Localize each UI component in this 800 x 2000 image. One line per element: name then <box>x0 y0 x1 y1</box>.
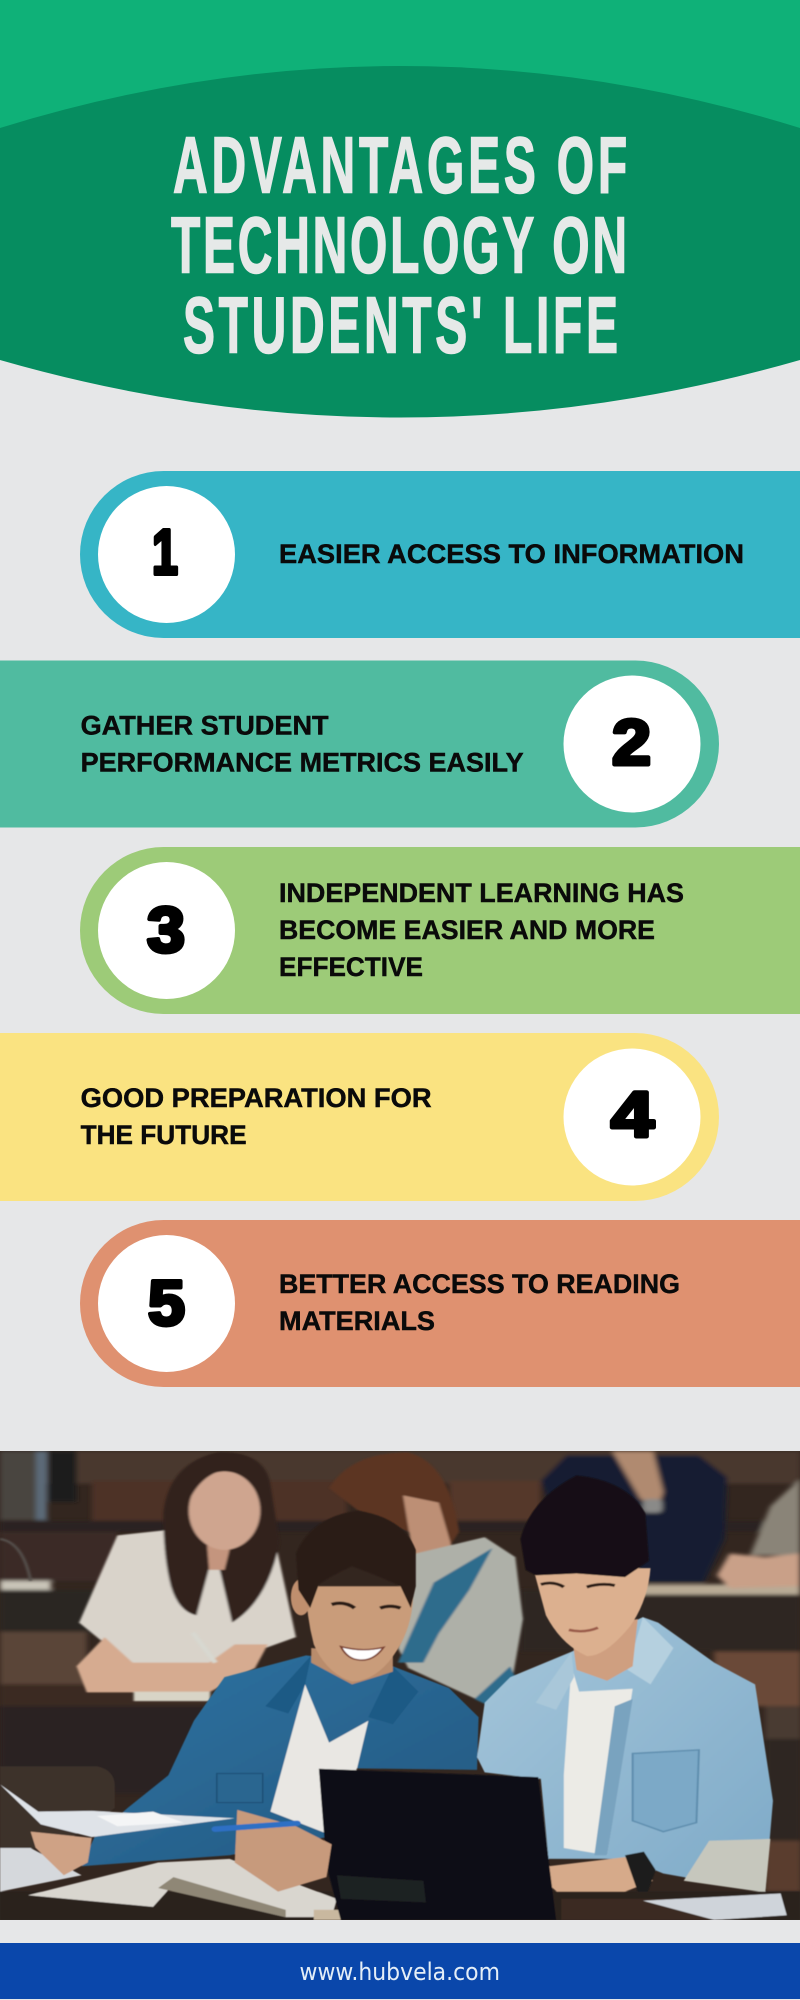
panel: item 5 <box>80 1220 800 1387</box>
panel: item 4 <box>0 1033 719 1201</box>
photo: students with laptop in lecture hall <box>0 1451 800 1920</box>
back right person <box>541 1455 727 1583</box>
title: TECHNOLOGY ON <box>171 200 627 289</box>
icon: number 1 badge <box>98 486 235 623</box>
icon: number 1 badge: 1 <box>152 516 178 588</box>
loose papers and open book <box>0 1847 342 1920</box>
hand holding paper <box>0 1784 235 1875</box>
text: item 3: INDEPENDENT LEARNING HAS <box>279 878 684 908</box>
text: item 5 <box>279 1269 680 1336</box>
woman at left <box>0 1452 296 1701</box>
text: item 5: BETTER ACCESS TO READING <box>279 1269 680 1299</box>
far right person <box>750 1479 800 1555</box>
title <box>171 120 627 369</box>
icon: number 5 badge: 5 <box>148 1267 185 1339</box>
foreground subjects <box>0 1475 800 1920</box>
man in dark denim <box>82 1511 479 1866</box>
text: item 2: GATHER STUDENT <box>81 710 329 740</box>
icon: number 2 badge <box>564 676 700 812</box>
man in light denim <box>477 1475 773 1904</box>
text: item 4: GOOD PREPARATION FOR <box>81 1083 432 1113</box>
text: item 3 <box>279 878 684 982</box>
icon: number 3 badge: 3 <box>147 894 185 966</box>
text: item 4: THE FUTURE <box>81 1120 247 1150</box>
panel: item 3 <box>80 847 800 1014</box>
icon: number 4 badge <box>564 1048 700 1186</box>
footer url: www.hubvela.com <box>300 1958 500 1986</box>
icon: number 5 badge <box>98 1235 235 1372</box>
icon: number 4 badge: 4 <box>611 1078 654 1150</box>
laptop <box>319 1769 556 1920</box>
chair foreground left <box>0 1766 115 1848</box>
icon: number 3 badge <box>98 862 235 999</box>
icon: number 2 badge: 2 <box>612 706 651 778</box>
hand holding pen <box>215 1810 332 1892</box>
text: item 3: EFFECTIVE <box>279 952 423 982</box>
header band <box>0 0 800 418</box>
title: STUDENTS' LIFE <box>183 280 618 369</box>
text: item 2: PERFORMANCE METRICS EASILY <box>81 748 524 778</box>
title: ADVANTAGES OF <box>173 120 627 209</box>
desk <box>0 1892 800 1920</box>
text: item 1: EASIER ACCESS TO INFORMATION <box>279 539 744 569</box>
footer band <box>0 1943 800 1999</box>
text: item 2 <box>81 710 524 778</box>
panel: item 1 <box>80 471 800 638</box>
woman in middle <box>329 1452 523 1706</box>
panel: item 2 <box>0 660 719 828</box>
notebook right <box>643 1893 787 1920</box>
text: item 4 <box>81 1083 432 1150</box>
text: item 5: MATERIALS <box>279 1306 435 1336</box>
blurred classroom background <box>0 1451 800 1892</box>
text: item 3: BECOME EASIER AND MORE <box>279 915 655 945</box>
